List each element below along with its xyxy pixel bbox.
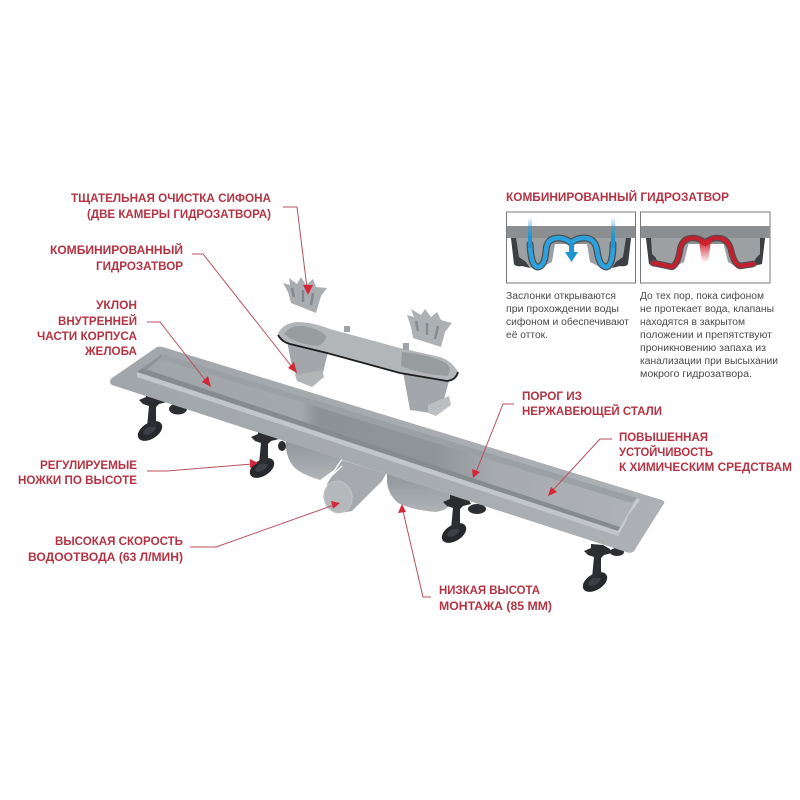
left insert leg: [287, 341, 328, 380]
label: chemical resistance: К ХИМИЧЕСКИМ СРЕДСТВАМ: [619, 462, 792, 474]
right damper: [407, 309, 452, 347]
label: chemical resistance: УСТОЙЧИВОСТЬ: [619, 446, 713, 459]
label: inner slope: ВНУТРЕННЕЙ: [58, 315, 137, 328]
label: low installation height: МОНТАЖА (85 ММ): [439, 601, 552, 613]
text: left panel description: при прохождении воды: [506, 304, 619, 315]
channel flange plate: [110, 347, 664, 553]
trough front lip: [137, 372, 618, 536]
adjustable legs: [134, 393, 612, 596]
leader: adjustable feet: [147, 459, 258, 471]
text: right panel description: До тех пор, пока сифоном: [640, 290, 764, 302]
trough front dark edge: [137, 368, 620, 531]
callout leaders with arrows: [147, 207, 612, 597]
leader: threshold: [472, 404, 514, 478]
leader: slope: [147, 322, 211, 387]
label: combined trap: КОМБИНИРОВАННЫЙ: [50, 244, 183, 257]
right insert base clip: [428, 396, 451, 416]
drain assembly: [110, 347, 664, 596]
text: left panel description: её отток.: [506, 330, 548, 341]
label: combined trap: [50, 244, 183, 273]
label: inner slope: ЧАСТИ КОРПУСА: [37, 331, 137, 343]
text: right panel description: проникновению запаха из: [640, 343, 766, 354]
label: inner slope: УКЛОН: [96, 300, 137, 312]
label: adjustable feet: [18, 460, 137, 487]
insert black gasket: [278, 335, 458, 381]
closed white valve circle: [694, 242, 716, 264]
panel: water flowing through trap: [506, 212, 636, 283]
label: chemical resistance: ПОВЫШЕННАЯ: [619, 432, 708, 444]
text: left panel description: [506, 291, 629, 341]
label: flow rate: [28, 536, 183, 564]
left siphon bowl: [286, 438, 342, 480]
leader: flow rate: [190, 501, 340, 547]
left insert base clip: [295, 370, 324, 387]
label: combined trap: ГИДРОЗАТВОР: [96, 261, 183, 273]
trap housing: [507, 226, 635, 269]
label: inner slope: ЖЕЛОБА: [84, 346, 137, 358]
text: right panel description: канализации при высыхании: [640, 356, 778, 367]
text: right panel description: [640, 290, 778, 380]
insert left cup: [284, 326, 326, 346]
left damper: [283, 277, 327, 313]
label: adjustable feet: РЕГУЛИРУЕМЫЕ: [40, 460, 137, 472]
trough left end wall: [137, 354, 162, 372]
label: stainless threshold: ПОРОГ ИЗ: [522, 391, 582, 403]
label: stainless threshold: НЕРЖАВЕЮЩЕЙ СТАЛИ: [522, 405, 662, 418]
label: low installation height: [439, 585, 552, 613]
panel: closed trap with red block: [640, 212, 770, 283]
rear adjustable feet: [169, 404, 624, 556]
label: siphon cleaning: (ДВЕ КАМЕРЫ ГИДРОЗАТВОРА): [87, 209, 271, 221]
blue water path: [530, 238, 613, 267]
text: left panel description: Заслонки открываются: [506, 291, 616, 302]
water inlet columns: [528, 218, 615, 248]
insert right cup: [401, 352, 450, 376]
text: right panel description: мокрого гидрозатвора.: [640, 369, 752, 380]
text: left panel description: сифоном и обеспечивают: [506, 316, 629, 328]
outlet pipe: [321, 460, 386, 516]
text: right panel description: не протекает вода, клапаны: [640, 304, 774, 315]
leader: siphon cleaning: [283, 207, 313, 295]
insert body: [278, 322, 458, 381]
leader: low height: [398, 504, 431, 597]
red fade in valve: [699, 241, 711, 262]
label: chemical resistance: [619, 432, 792, 474]
red blocked seal: [653, 238, 753, 267]
down arrow: [565, 243, 578, 262]
leader: chemical resistance: [548, 439, 612, 496]
label: siphon cleaning: [71, 193, 271, 221]
leader: combined trap: [192, 254, 297, 373]
label: stainless threshold: [522, 391, 662, 418]
label: flow rate: ВЫСОКАЯ СКОРОСТЬ: [55, 536, 183, 548]
insert tabs: [344, 326, 409, 350]
siphon insert exploded view: [278, 277, 458, 416]
white valve circle: [560, 242, 582, 264]
closed trap housing: [641, 226, 770, 268]
label: low installation height: НИЗКАЯ ВЫСОТА: [439, 585, 540, 597]
right insert leg: [403, 372, 449, 413]
trough back wall: [160, 354, 637, 503]
text: right panel description: положении и препятствуют: [640, 330, 772, 341]
text: right panel description: находятся в закрытом: [640, 317, 745, 328]
channel trough interior: [137, 354, 637, 531]
label: inner slope: [37, 300, 137, 358]
label: siphon cleaning: ТЩАТЕЛЬНАЯ ОЧИСТКА СИФОНА: [71, 193, 271, 205]
label: flow rate: ВОДООТВОДА (63 Л/МИН): [28, 552, 183, 564]
heading: combined trap panels: КОМБИНИРОВАННЫЙ ГИДРОЗАТВОР: [506, 189, 729, 204]
label: adjustable feet: НОЖКИ ПО ВЫСОТЕ: [18, 475, 137, 487]
trough end wall: [618, 498, 640, 536]
right siphon bowl: [387, 472, 462, 512]
